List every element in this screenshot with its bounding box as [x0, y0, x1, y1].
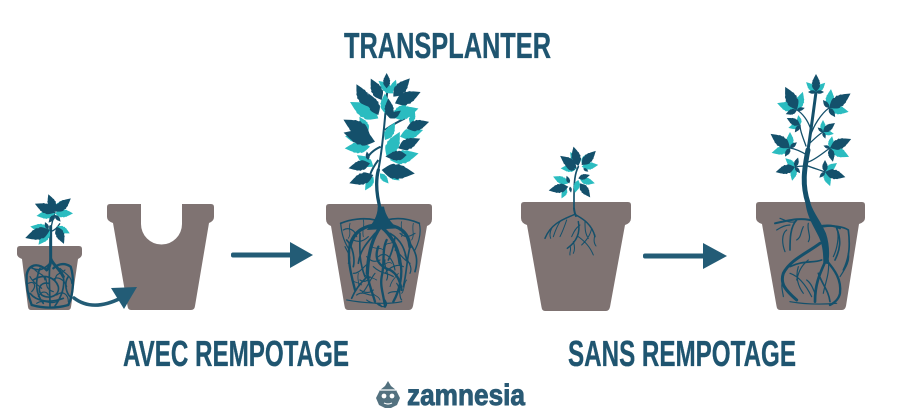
title: TRANSPLANTER	[344, 25, 551, 66]
light leaves	[344, 77, 425, 192]
large pot with seedling-shaped cut-out	[107, 204, 214, 310]
deep roots	[775, 202, 849, 305]
curved arrow into cut-out pot	[74, 287, 137, 309]
stem	[377, 170, 381, 212]
leaves, dark	[767, 74, 854, 182]
arrow: second pot path	[643, 243, 727, 269]
large pot with full root system and bushy plant	[326, 73, 432, 310]
label: with repotting: AVEC REMPOTAGE	[123, 333, 349, 374]
arrow: first transplant	[231, 242, 313, 268]
large pot with young plant and short roots	[521, 145, 631, 311]
logo: wordmark: zamnesia	[407, 379, 525, 412]
plant stems	[790, 92, 830, 203]
leaves, light	[770, 80, 851, 187]
logo: mask icon	[376, 381, 400, 408]
roots	[341, 207, 420, 307]
label: without repotting: SANS REMPOTAGE	[568, 333, 796, 374]
small pot with root-bound seedling	[17, 193, 82, 310]
dark leaves	[340, 73, 431, 189]
large pot with tall plant and deep roots	[756, 74, 865, 310]
